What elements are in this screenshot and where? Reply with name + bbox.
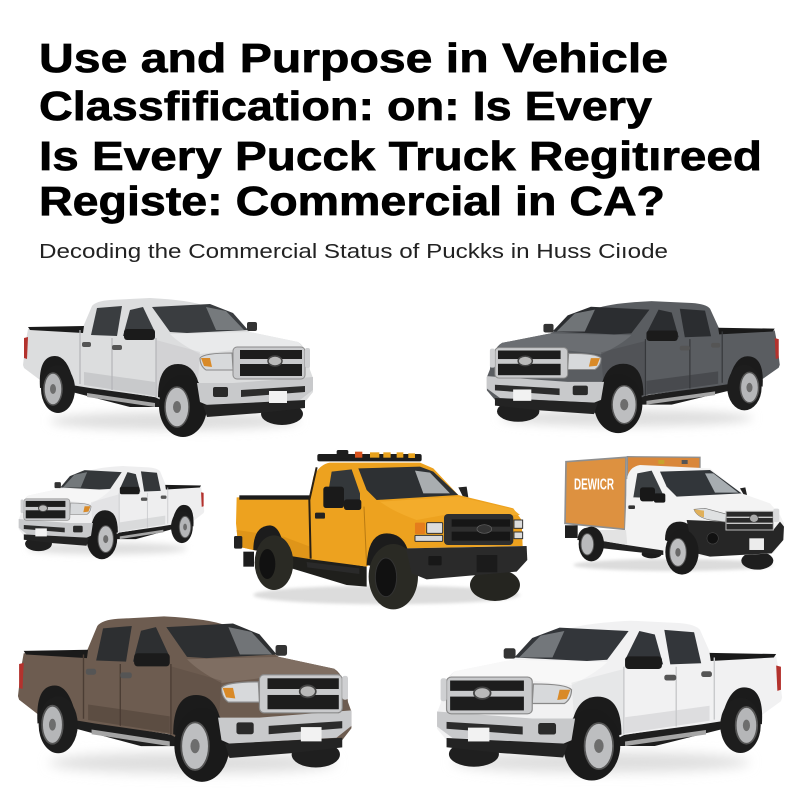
truck: yellow work pickup [234,450,527,609]
title: Is Every Pucck Truck Regitıreed [39,133,762,179]
title [39,35,762,224]
subtitle: Decoding the Commercial Status of Puckks in Huss Ciıode [39,241,668,263]
title: Use and Purpose in Vehicle [39,35,668,81]
truck: brown pickup [18,616,351,782]
title: Classfification: on: Is Every [39,83,652,129]
truck: small white pickup [19,466,204,559]
truck: dark grey pickup [487,301,780,433]
truck: silver pickup [23,298,313,437]
cargo box: DEWICR [574,476,614,493]
cargo box [565,457,700,529]
truck: white delivery truck with orange box [565,457,784,575]
title: Registe: Commercial in CA? [39,178,665,224]
truck: white pickup [437,621,782,781]
